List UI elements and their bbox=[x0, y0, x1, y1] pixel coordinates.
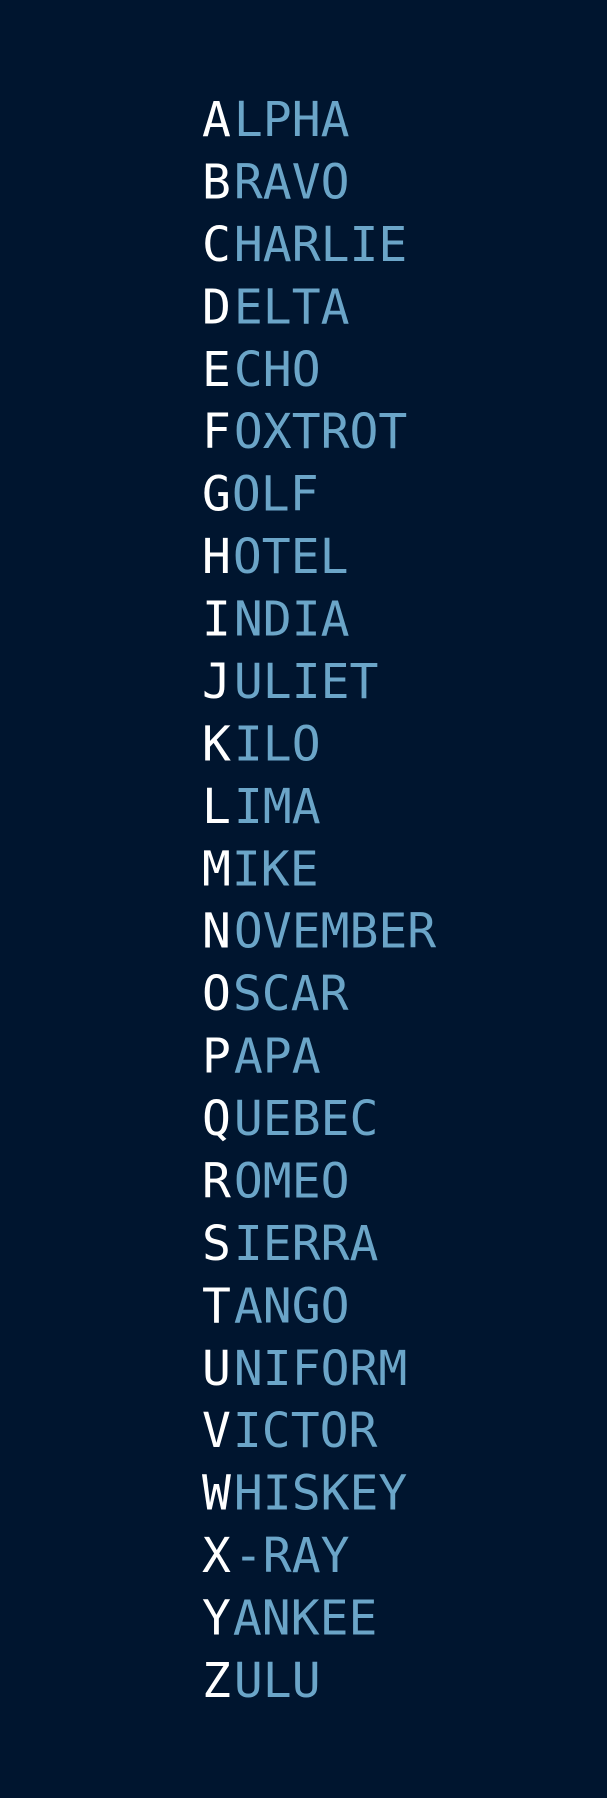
line: Romeo: ROMEO bbox=[202, 1154, 350, 1210]
line: November: NOVEMBER bbox=[202, 904, 436, 960]
line: Uniform: UNIFORM bbox=[202, 1341, 407, 1397]
line: Juliet: JULIET bbox=[202, 654, 378, 710]
line: India: INDIA bbox=[202, 592, 350, 648]
line: Lima: LIMA bbox=[202, 779, 321, 835]
line: Delta: DELTA bbox=[202, 279, 350, 335]
line: Victor: VICTOR bbox=[202, 1403, 378, 1459]
line: Foxtrot: FOXTROT bbox=[202, 404, 407, 460]
line: Quebec: QUEBEC bbox=[202, 1091, 378, 1147]
line: Yankee: YANKEE bbox=[202, 1591, 377, 1647]
line: Zulu: ZULU bbox=[202, 1653, 321, 1709]
line: Kilo: KILO bbox=[202, 716, 321, 772]
line: Charlie: CHARLIE bbox=[202, 217, 407, 273]
alphabet list bbox=[202, 92, 436, 1709]
line: Oscar: OSCAR bbox=[202, 966, 349, 1022]
line: Tango: TANGO bbox=[202, 1278, 350, 1334]
line: Hotel: HOTEL bbox=[202, 529, 348, 585]
line: Papa: PAPA bbox=[202, 1029, 321, 1085]
line: Sierra: SIERRA bbox=[202, 1216, 378, 1272]
line: Mike: MIKE bbox=[202, 841, 319, 897]
line: X-ray: X-RAY bbox=[202, 1528, 350, 1584]
line: Echo: ECHO bbox=[202, 342, 321, 398]
line: Bravo: BRAVO bbox=[202, 154, 350, 210]
line: Golf: GOLF bbox=[202, 467, 319, 523]
line: Alpha: ALPHA bbox=[202, 92, 350, 148]
line: Whiskey: WHISKEY bbox=[202, 1466, 407, 1522]
